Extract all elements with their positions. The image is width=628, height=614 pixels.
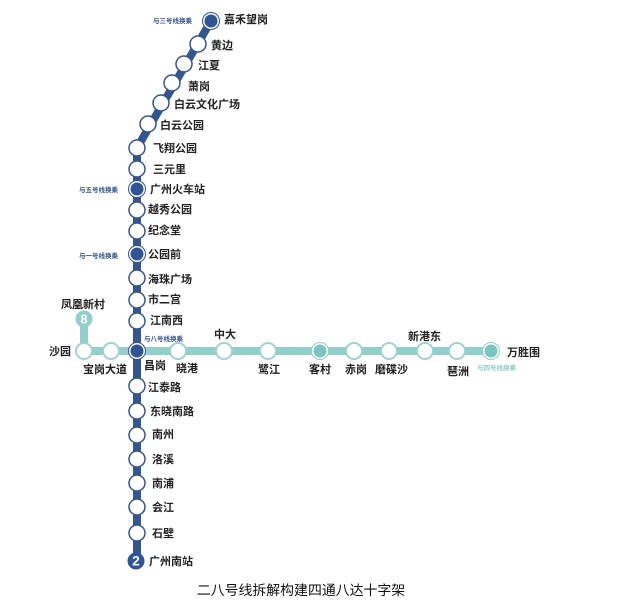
line 8 stations [76,343,465,359]
line 8 station labels: 沙园 [49,345,71,358]
caption: 二八号线拆解构建四通八达十字架 [197,582,405,598]
line 2 station labels: 东晓南路 [150,404,194,418]
line 2 station labels: 昌岗 [144,359,166,372]
interchange notes: 与四号线换乘 [477,363,516,372]
interchange notes: 与三号线换乘 [153,16,192,25]
line 2 station labels: 白云公园 [160,118,204,132]
line 8 station labels: 新港东 [408,329,441,343]
line 2 station labels: 嘉禾望岗 [224,12,268,26]
interchange notes: 与八号线换乘 [144,334,184,343]
line 2 terminus badge: 2 [132,554,140,568]
line 8 station labels: 凤凰新村 [61,297,105,311]
line 2 terminus badge [128,552,144,570]
line 2 station labels: 海珠广场 [148,272,192,286]
interchange notes: 与一号线换乘 [79,251,118,260]
line 8 station labels: 中大 [214,327,236,341]
interchange stations [128,12,500,360]
line 8 terminus badge: 8 [81,312,88,326]
line 2 station labels: 广州南站 [149,554,193,568]
line 8 station labels: 客村 [309,362,331,376]
line 8 station labels: 磨碟沙 [375,362,408,376]
line 2 station labels: 石壁 [152,526,174,540]
line 2 station labels: 飞翔公园 [153,141,197,155]
line 2 stations [129,36,206,541]
interchange notes: 与五号线换乘 [79,185,118,194]
line 2 station labels: 纪念堂 [148,223,181,237]
line 2 station labels: 萧岗 [188,80,210,93]
line 2 station labels: 市二宫 [148,292,181,306]
line 8 track [84,320,491,351]
line 2 track [137,21,211,561]
line 8 station labels: 宝岗大道 [83,362,127,376]
line 8 terminus badge [76,310,92,328]
line 2 station labels: 南浦 [152,476,174,490]
interchange notes [79,16,516,372]
line 2 station labels [144,12,268,568]
line 2 station labels: 黄边 [211,38,233,52]
line 8 station labels: 鹭江 [258,362,280,376]
line 2 station labels: 会江 [152,500,174,514]
line 2 station labels: 公园前 [148,247,181,261]
line 2 station labels: 江夏 [198,59,220,72]
line 8 station labels: 赤岗 [345,363,367,376]
line 2 station labels: 越秀公园 [148,202,192,216]
line 8 station labels: 万胜围 [507,345,540,359]
line 2 station labels: 南州 [152,428,174,441]
line 2 station labels: 广州火车站 [150,182,205,196]
line 8 station labels: 琶洲 [447,365,469,378]
line 8 station labels [49,297,540,378]
line 8 station labels: 晓港 [176,361,198,375]
line 2 station labels: 洛溪 [152,452,174,466]
line 2 station labels: 白云文化广场 [174,97,240,111]
line 2 station labels: 三元里 [153,163,186,176]
line 2 station labels: 江南西 [150,314,183,327]
line 2 station labels: 江泰路 [148,380,181,394]
